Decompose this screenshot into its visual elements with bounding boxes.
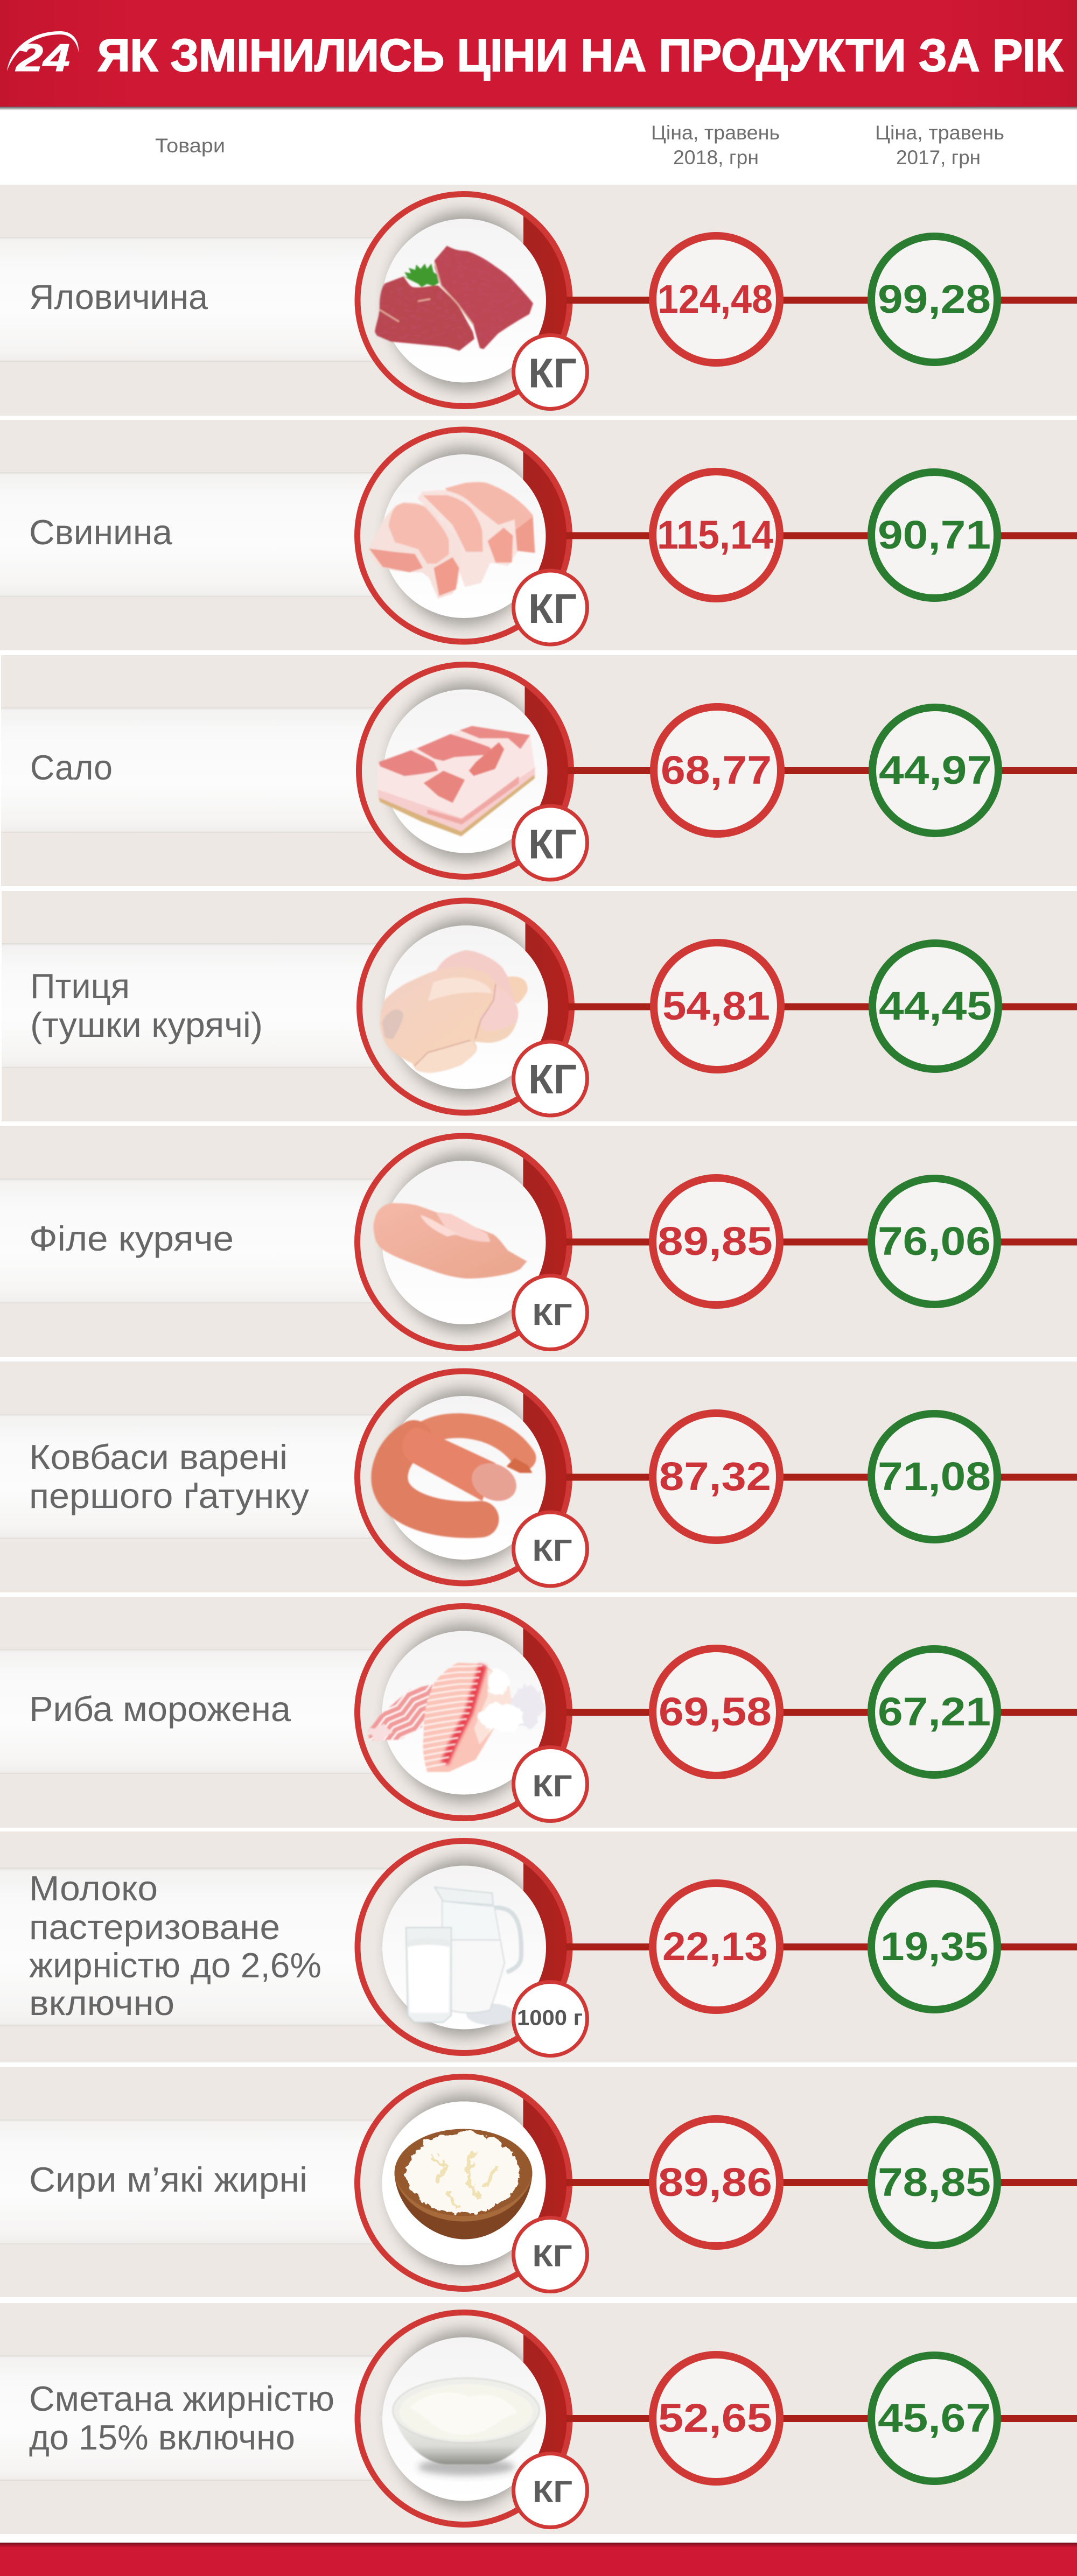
unit badge: КГ: [532, 1769, 572, 1803]
price 2017: 71,08: [878, 1454, 991, 1499]
row: sour cream: [0, 2303, 1077, 2534]
row: boiled sausage: [0, 1361, 1077, 1592]
price 2018: 89,86: [658, 2160, 772, 2205]
icon: beef: [375, 245, 533, 351]
unit badge: [514, 806, 587, 880]
price 2017: 44,97: [879, 748, 992, 792]
unit badge: КГ: [528, 1056, 577, 1103]
price 2017: 90,71: [878, 513, 991, 557]
label panel: milk: Молоко: [29, 1869, 158, 1908]
unit badge: КГ: [533, 2474, 572, 2509]
icon: whole chicken: [380, 950, 528, 1073]
label panel: beef: Яловичина: [29, 277, 208, 317]
product disc: pork: [358, 430, 587, 644]
price 2017: [871, 1414, 997, 1540]
price 2018: [654, 707, 781, 834]
row: frozen fish: [0, 1597, 1077, 1828]
icon: cottage cheese bowl: [394, 2129, 532, 2240]
price 2017: 45,67: [878, 2396, 991, 2440]
icon: pork chops: [369, 482, 535, 599]
unit badge: КГ: [532, 1533, 572, 1568]
label panel: frozen fish: Риба морожена: [29, 1689, 291, 1729]
unit badge: [514, 335, 587, 409]
label panel: sour cream: Сметана жирністю: [29, 2379, 334, 2418]
product disc: sour cream: [358, 2313, 587, 2527]
price 2017: [871, 1649, 997, 1775]
unit badge: [514, 2454, 587, 2527]
column headings: Ціна, травень: [651, 122, 780, 144]
unit badge: КГ: [532, 2238, 572, 2273]
label panel: chicken fillet: [0, 1178, 388, 1303]
unit badge: [514, 2218, 587, 2291]
label panel: frozen fish: [0, 1649, 388, 1774]
price 2018: 87,32: [659, 1454, 771, 1499]
unit badge: [514, 571, 587, 644]
price 2017: [871, 472, 997, 598]
label panel: milk: включно: [29, 1983, 174, 2023]
label panel: soft cheese: [0, 2119, 388, 2244]
label panel: milk: пастеризоване: [29, 1907, 280, 1947]
price 2018: 68,77: [661, 748, 772, 792]
price 2018: 22,13: [662, 1924, 768, 1969]
unit badge: [514, 1042, 587, 1115]
label panel: sour cream: до 15% включно: [29, 2418, 295, 2457]
product disc: poultry: [360, 901, 587, 1115]
price 2018: [653, 1413, 780, 1540]
price 2018: 89,85: [658, 1219, 773, 1264]
header banner: [0, 0, 1077, 110]
unit badge: [514, 1982, 587, 2055]
column headings: Ціна, травень: [875, 122, 1004, 144]
price 2017: [871, 236, 997, 362]
label panel: poultry: [2, 943, 389, 1068]
column headings: 2018, грн: [673, 146, 759, 169]
unit badge: КГ: [528, 586, 577, 632]
price 2018: 124,48: [658, 277, 773, 321]
row: salo: [1, 655, 1077, 886]
unit badge: [514, 1276, 587, 1349]
unit badge: КГ: [532, 1297, 572, 1332]
title: ЯК ЗМІНИЛИСЬ ЦІНИ НА ПРОДУКТИ ЗА РІК: [97, 30, 1063, 81]
row: poultry: [2, 891, 1077, 1121]
product disc: beef: [358, 194, 587, 409]
price 2017: [871, 2119, 997, 2245]
icon: sour cream bowl: [393, 2378, 540, 2475]
column headings: 2017, грн: [896, 146, 981, 169]
row: milk: [0, 1831, 1077, 2062]
price 2018: [653, 2119, 780, 2246]
product disc: milk: [358, 1841, 587, 2055]
product disc: boiled sausage: [358, 1371, 587, 1586]
label panel: pork: [0, 472, 388, 597]
label panel: pork: Свинина: [29, 513, 173, 552]
label panel: poultry: Птиця: [30, 966, 130, 1006]
column headings: Товари: [155, 135, 225, 157]
price 2017: [871, 2355, 997, 2481]
label panel: salo: [1, 707, 389, 833]
price 2017: [872, 707, 998, 833]
price 2018: [653, 1648, 780, 1775]
price 2017: 19,35: [880, 1924, 988, 1969]
label panel: salo: Сало: [30, 748, 113, 787]
label panel: boiled sausage: Ковбаси варені: [29, 1437, 288, 1477]
price 2018: 54,81: [662, 984, 770, 1028]
icon: fish fillet: [368, 1662, 543, 1772]
product disc: soft cheese: [358, 2077, 587, 2291]
unit badge: КГ: [528, 350, 577, 396]
price 2017: 78,85: [878, 2160, 991, 2205]
price 2017: [872, 943, 998, 1069]
label panel: boiled sausage: першого ґатунку: [29, 1476, 310, 1515]
unit badge: КГ: [528, 822, 577, 868]
price 2017: [871, 1884, 997, 2010]
price 2018: [653, 1883, 780, 2010]
unit badge: [514, 1512, 587, 1586]
label panel: beef: [0, 237, 388, 362]
row: chicken fillet: [0, 1126, 1077, 1357]
price 2018: [654, 943, 781, 1070]
product disc: chicken fillet: [358, 1136, 587, 1349]
price 2018: 115,14: [657, 513, 773, 557]
price 2018: [653, 1178, 780, 1305]
price 2018: 52,65: [658, 2396, 772, 2440]
label panel: milk: [0, 1868, 388, 2026]
icon: sausage: [389, 1426, 532, 1520]
footer band: [0, 2543, 1077, 2576]
row: beef: [0, 185, 1077, 416]
price 2017: 99,28: [878, 277, 991, 321]
product disc: salo: [359, 664, 587, 880]
price 2017: 76,06: [878, 1219, 991, 1264]
label panel: soft cheese: Сири м’які жирні: [29, 2160, 307, 2199]
price 2017: [871, 1178, 997, 1304]
price 2018: [653, 236, 780, 363]
product disc: frozen fish: [358, 1606, 587, 1821]
row: soft cheese: [0, 2067, 1077, 2297]
unit badge: 1000 г: [517, 2006, 583, 2030]
label panel: boiled sausage: [0, 1414, 388, 1539]
unit badge: [514, 1747, 587, 1821]
label panel: poultry: (тушки курячі): [30, 1005, 263, 1044]
icon: salo: [377, 726, 535, 837]
price 2017: 44,45: [879, 984, 992, 1028]
icon: chicken fillet: [374, 1203, 527, 1279]
price 2018: [653, 472, 780, 599]
price 2018: 69,58: [659, 1689, 772, 1734]
column headings: [155, 122, 1004, 169]
label panel: chicken fillet: Філе куряче: [29, 1219, 234, 1258]
label panel: milk: жирністю до 2,6%: [29, 1946, 321, 1985]
label panel: sour cream: [0, 2355, 388, 2481]
icon: milk jug and glass: [406, 1887, 521, 2025]
row: pork: [0, 420, 1077, 650]
logo 24: [7, 31, 79, 80]
price 2017: 67,21: [878, 1689, 991, 1734]
logo 24: 24: [15, 37, 70, 80]
price 2018: [653, 2355, 780, 2482]
